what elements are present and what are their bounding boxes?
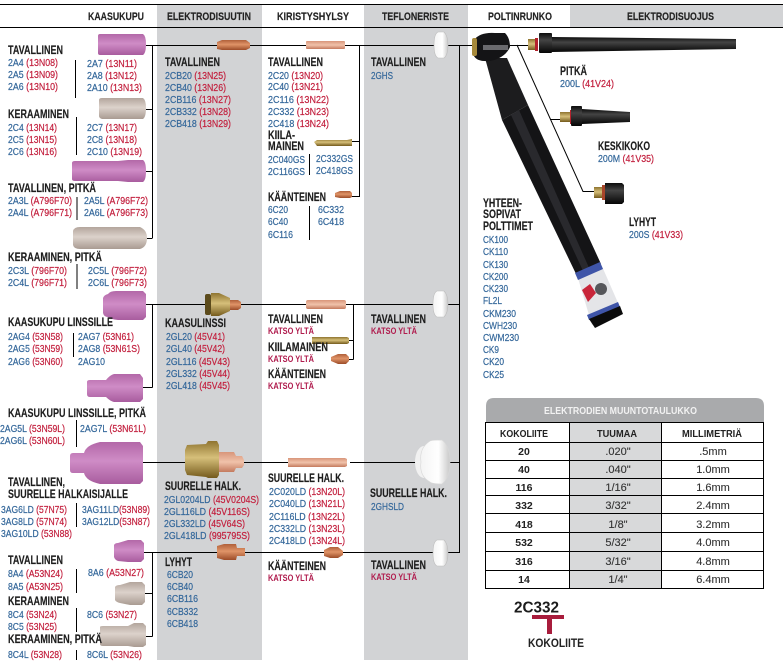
label: kaasukupu linssille: 2AG7 (53N61): [78, 331, 134, 343]
list: yhteensopivat polttimet: SOPIVAT: [483, 209, 521, 221]
label: keraaminen pitka: 2C3L (796F70): [8, 265, 67, 277]
table column headers: [500, 427, 742, 440]
label: kaanteinen katso ylta: KÄÄNTEINEN: [268, 560, 326, 573]
label: suurelle halk 2GHSLD: SUURELLE HALK.: [370, 488, 447, 500]
label: kaasukupu linssille: KAASUKUPU LINSSILLE: [8, 317, 113, 329]
label: lyhyt: 6CB418: [167, 618, 198, 630]
icon: nozzle tip: [217, 40, 250, 50]
icon: ceramic cup: [99, 98, 146, 119]
label: suurelle halk: 2GL0204LD (45V0204S): [164, 494, 259, 506]
label: tavallinen: TAVALLINEN: [8, 45, 63, 57]
table column headers: MILLIMETRIÄ: [682, 427, 742, 440]
label: kaanteinen: 6C20: [268, 204, 288, 216]
label: tavallinen pitka: 2A5L (A796F72): [84, 195, 148, 207]
label: kiilamainen: 2C116GS: [268, 166, 305, 178]
label: kaasulinssi: 2GL20 (45V41): [166, 331, 225, 343]
icon: short nozzle: [217, 544, 245, 560]
list: yhteensopivat polttimet: CK230: [483, 283, 508, 295]
label: tavallinen suurelle halkaisijalle: [1, 477, 150, 540]
label: lyhyt: LYHYT: [165, 557, 192, 569]
label: tavallinen: [268, 57, 329, 130]
label: kaasulinssi: 2GL418 (45V45): [166, 380, 230, 392]
icon: long pink cup: [72, 160, 146, 182]
panel: column background elektrodisuutin: [157, 5, 262, 660]
label: tavallinen suurelle halkaisijalle: TAVALLINEN,: [8, 477, 65, 489]
header row: [88, 11, 714, 23]
label: keraaminen 8C: 8C6 (53N27): [87, 609, 137, 621]
icon: collet: [306, 41, 345, 49]
label: keraaminen 8C: 8C5 (53N25): [8, 621, 57, 633]
label: keraaminen: 2C8 (13N18): [87, 134, 137, 146]
table rows: 1/4": [608, 574, 628, 586]
table rows: 532: [515, 537, 533, 549]
label: tavallinen suurelle halkaisijalle: 3AG12LD(53N87): [82, 516, 150, 528]
label: kaanteinen: 6C116: [268, 229, 293, 241]
table rows: 20: [518, 446, 530, 458]
heading: elektrodisuojus: ELEKTRODISUOJUS: [627, 11, 714, 23]
label: kiilamainen: [268, 130, 353, 178]
icon: long back cap: [528, 33, 736, 53]
list: yhteensopivat polttimet: CK110: [483, 246, 508, 258]
label: suurelle halk: 2C040LD (13N21L): [269, 498, 345, 510]
label: tavallinen: 2CB20 (13N25): [165, 70, 226, 82]
table title: ELEKTRODIEN MUUNTOTAULUKKO: [544, 405, 697, 417]
heading: kaasukupu: KAASUKUPU: [88, 11, 144, 23]
label: tavallinen: 2C116 (13N22): [268, 94, 329, 106]
icon: large teflon insulator: [415, 440, 450, 484]
diagonal connector to shields: [517, 45, 594, 192]
table rows: .040": [605, 464, 631, 476]
label: kaasulinssi: 2GL116 (45V43): [166, 356, 230, 368]
label: tavallinen pitka: 2A4L (A796F71): [8, 207, 72, 219]
label: kaanteinen: [268, 191, 344, 241]
list: yhteensopivat polttimet: FL2L: [483, 295, 502, 307]
label: keskikoko: KESKIKOKO: [598, 141, 650, 153]
label: tavallinen pitka: TAVALLINEN, PITKÄ: [8, 182, 96, 195]
icon: reverse collet second row: [331, 354, 349, 364]
label: lyhyt: 6CB20: [167, 569, 193, 581]
label: tavallinen katso ylta lower: TAVALLINEN: [371, 560, 426, 572]
label: tavallinen: 2A5 (13N09): [8, 69, 58, 81]
label: tavallinen suurelle halkaisijalle: 3AG6LD (57N75): [1, 504, 67, 516]
label: tavallinen suurelle halkaisijalle: 3AG8LD (57N74): [1, 516, 67, 528]
connector lines: [143, 45, 530, 636]
label: keraaminen pitka 8C: 8C6L (53N26): [87, 649, 142, 661]
label: kaasulinssi: 2GL332 (45V44): [166, 368, 230, 380]
label: second row references: KATSO YLTÄ: [268, 326, 314, 337]
table rows: 1.6mm: [696, 482, 730, 494]
label: suurelle halk: 2C332LD (13N23L): [269, 523, 345, 535]
label: tavallinen: 2CB116 (13N27): [165, 94, 231, 106]
label: keraaminen: 2C5 (13N15): [8, 134, 57, 146]
label: suurelle halk: [164, 481, 259, 542]
label: suurelle halk: 2C020LD (13N20L): [269, 486, 345, 498]
icon: long lens cup: [87, 374, 143, 402]
label: suurelle halk: [268, 473, 345, 547]
column: elektrodisuutin: [164, 40, 259, 630]
label: keraaminen pitka 8C: 8C4L (53N28): [8, 649, 62, 661]
table rows: 5/32": [605, 537, 631, 549]
icon: long collet: [288, 458, 347, 467]
heading: tefloneriste: TEFLONERISTE: [382, 11, 449, 23]
list: yhteensopivat polttimet: CWH230: [483, 320, 517, 332]
label: suurelle halk 2GHSLD: [370, 488, 447, 513]
label: pitka: [560, 65, 614, 90]
table rows: 4.8mm: [696, 556, 730, 568]
label: suurelle halk 2GHSLD: 2GHSLD: [371, 501, 404, 513]
table header bar: [486, 398, 764, 422]
label: tavallinen: 2A4 (13N08): [8, 57, 58, 69]
label: kaanteinen: 6C40: [268, 216, 288, 228]
key: 2C332 size code: [514, 600, 584, 650]
table rows: 3/16": [605, 556, 631, 568]
label: kiilamainen: 2C332GS: [316, 153, 353, 165]
icon: short pink cup: [114, 540, 144, 562]
label: tavallinen 2GHS: 2GHS: [371, 70, 393, 82]
label: tavallinen katso ylta: [371, 314, 426, 337]
icon: short ceramic cup: [115, 582, 145, 605]
list: yhteensopivat polttimet: CK130: [483, 259, 508, 271]
label: tavallinen: 2CB40 (13N26): [165, 82, 226, 94]
label: suurelle halk: 2GL332LD (45V64S): [164, 518, 245, 530]
label: tavallinen: 2CB332 (13N28): [165, 106, 231, 118]
label: tavallinen 8A: 8A6 (A53N27): [88, 567, 144, 579]
table rows: [515, 446, 730, 586]
label: tavallinen: [165, 57, 231, 130]
label: tavallinen: 2A6 (13N10): [8, 81, 58, 93]
list: yhteensopivat polttimet: POLTTIMET: [483, 221, 533, 233]
icon: teflon insulator second row: [433, 291, 448, 317]
table rows: 14: [518, 574, 530, 586]
label: kiilamainen: 2C040GS: [268, 154, 305, 166]
label: kaanteinen: KÄÄNTEINEN: [268, 191, 326, 204]
label: suurelle halk: 2C116LD (13N22L): [269, 511, 345, 523]
label: second row references: TAVALLINEN: [268, 314, 323, 326]
label: keraaminen: 2C6 (13N16): [8, 146, 57, 158]
label: tavallinen: 2C20 (13N20): [268, 70, 323, 82]
label: keskikoko: [598, 141, 654, 165]
label: tavallinen 8A: TAVALLINEN: [8, 555, 63, 567]
label: keraaminen: 2C7 (13N17): [87, 122, 137, 134]
label: lyhyt: LYHYT: [629, 217, 656, 229]
table rows: 116: [516, 482, 533, 494]
table rows: 40: [518, 464, 530, 476]
label: tavallinen: TAVALLINEN: [268, 57, 323, 69]
label: tavallinen: 2A8 (13N12): [87, 70, 137, 82]
icon: long short ceramic cup: [100, 623, 146, 647]
table rows: 2.4mm: [696, 500, 730, 512]
label: lyhyt: 6CB332: [167, 606, 198, 618]
icon: large gas lens: [185, 441, 244, 478]
table: elektrodien muuntotaulukko: [486, 398, 764, 589]
table rows: 4.0mm: [696, 537, 730, 549]
label: tavallinen katso ylta: KATSO YLTÄ: [371, 326, 417, 337]
label: kiilamainen: KIILA-: [268, 130, 295, 142]
table rows: 3/32": [605, 500, 631, 512]
label: kaasukupu linssille pitka: [0, 407, 146, 447]
list: yhteensopivat polttimet: CK200: [483, 271, 508, 283]
label: tavallinen 2GHS: [371, 57, 426, 82]
key: 2C332 size code: 2C332: [514, 600, 559, 616]
label: tavallinen: 2C40 (13N21): [268, 81, 323, 93]
label: tavallinen pitka: 2A6L (A796F73): [84, 207, 148, 219]
icon: wedge collet: [314, 139, 352, 146]
column: elektrodisuojus: [528, 33, 736, 241]
label: second row references: KIILAMAINEN: [268, 342, 328, 354]
label: tavallinen: [8, 45, 142, 94]
label: lyhyt: 200S (41V33): [629, 229, 683, 241]
label: tavallinen: 2CB418 (13N29): [165, 118, 231, 130]
label: kaasukupu linssille pitka: 2AG6L (53N60L): [0, 435, 65, 447]
heading: kiristyshylsy: KIRISTYSHYLSY: [277, 11, 350, 23]
heading: elektrodisuutin: ELEKTRODISUUTIN: [167, 11, 251, 23]
label: tavallinen katso ylta lower: KATSO YLTÄ: [371, 572, 417, 583]
label: second row references: [268, 314, 328, 392]
label: keraaminen: KERAAMINEN: [8, 109, 69, 121]
icon: reverse collet: [335, 191, 352, 198]
table rows: 332: [515, 500, 533, 512]
label: kaasukupu linssille pitka: 2AG5L (53N59L): [0, 423, 65, 435]
label: kaasulinssi: 2GL40 (45V42): [166, 343, 225, 355]
key: 2C332 size code: KOKOLIITE: [528, 638, 584, 650]
label: keraaminen pitka 8C: [8, 633, 142, 661]
label: tavallinen: TAVALLINEN: [165, 57, 220, 69]
table rows: 3.2mm: [696, 519, 730, 531]
icon: wedge collet second row: [312, 337, 349, 344]
label: kaasukupu linssille: 2AG10: [78, 356, 105, 368]
label: suurelle halk: 2C418LD (13N24L): [269, 535, 345, 547]
label: kaasukupu linssille: [8, 317, 140, 368]
label: suurelle halk: SUURELLE HALK.: [268, 473, 344, 485]
table rows: .5mm: [699, 446, 727, 458]
list: yhteensopivat polttimet: CK25: [483, 369, 504, 381]
column: kaasukupu: [0, 34, 150, 661]
label: keraaminen pitka: 2C4L (796F71): [8, 277, 67, 289]
label: kiilamainen: 2C418GS: [316, 165, 353, 177]
label: keraaminen: 2C10 (13N19): [87, 146, 142, 158]
label: keraaminen: [8, 109, 142, 158]
panel: column background tefloneriste: [364, 5, 468, 660]
list: yhteensopivat polttimet: CWM230: [483, 332, 519, 344]
label: suurelle halk: 2GL116LD (45V116S): [164, 506, 250, 518]
label: tavallinen: 2C418 (13N24): [268, 118, 329, 130]
label: kaasukupu linssille pitka: KAASUKUPU LINSSILLE, PITKÄ: [8, 407, 146, 420]
table rows: .020": [605, 446, 631, 458]
icon: long ceramic cup: [73, 227, 147, 249]
column: kiristyshylsy: [268, 41, 353, 584]
label: tavallinen 8A: 8A4 (A53N24): [8, 568, 63, 580]
list: yhteensopivat polttimet: CKM230: [483, 308, 516, 320]
panel: header background elektrodisuojus: [570, 5, 783, 27]
label: second row references: KÄÄNTEINEN: [268, 368, 326, 381]
table rows: 1/16": [605, 482, 631, 494]
label: tavallinen: 2C332 (13N23): [268, 106, 329, 118]
table rows: 1.0mm: [696, 464, 730, 476]
label: tavallinen pitka: [8, 182, 148, 219]
heading: poltinrunko: POLTINRUNKO: [488, 11, 552, 23]
icon: large cup: [70, 442, 143, 484]
icon: short collet: [324, 547, 343, 558]
label: tavallinen katso ylta lower: [371, 560, 426, 583]
label: tavallinen: 2A7 (13N11): [87, 58, 137, 70]
label: tavallinen 2GHS: TAVALLINEN: [371, 57, 426, 69]
label: keraaminen pitka: [8, 251, 147, 289]
label: kiilamainen: MAINEN: [268, 141, 304, 153]
table rows: 316: [515, 556, 533, 568]
list: yhteensopivat polttimet: YHTEEN-: [483, 198, 522, 210]
label: pitka: PITKÄ: [560, 65, 587, 78]
label: kaanteinen katso ylta: [268, 560, 326, 584]
label: keraaminen 8C: 8C4 (53N24): [8, 609, 57, 621]
label: kaasulinssi: [165, 318, 230, 392]
list: yhteensopivat polttimet: [483, 198, 533, 381]
label: kaasukupu linssille: 2AG4 (53N58): [8, 331, 63, 343]
icon: teflon insulator fourth row: [433, 540, 448, 566]
label: suurelle halk: 2GL418LD (995795S): [164, 530, 250, 542]
icon: short back cap: [594, 183, 624, 204]
label: keraaminen pitka: KERAAMINEN, PITKÄ: [8, 251, 102, 264]
label: keskikoko: 200M (41V35): [598, 153, 654, 165]
illustration: torch body: [472, 33, 623, 328]
label: keraaminen pitka 8C: KERAAMINEN, PITKÄ: [8, 633, 102, 646]
label: tavallinen 8A: 8A5 (A53N25): [8, 581, 63, 593]
label: kaanteinen katso ylta: KATSO YLTÄ: [268, 573, 314, 584]
label: tavallinen: 2A10 (13N13): [87, 82, 142, 94]
icon: pink gas cup: [98, 34, 146, 55]
icon: collet second row: [306, 300, 346, 309]
table rows: 418: [515, 519, 533, 531]
icon: lens cup: [103, 291, 146, 320]
label: kaasukupu linssille: 2AG8 (53N61S): [78, 343, 140, 355]
table column headers: KOKOLIITE: [500, 428, 548, 440]
label: lyhyt: [165, 557, 198, 630]
list: yhteensopivat polttimet: CK100: [483, 234, 508, 246]
list: yhteensopivat polttimet: CK9: [483, 344, 499, 356]
label: kaasukupu linssille pitka: 2AG7L (53N61L): [80, 423, 146, 435]
label: keraaminen 8C: [8, 596, 137, 633]
label: lyhyt: [629, 217, 683, 241]
label: tavallinen 8A: [8, 555, 144, 593]
label: tavallinen suurelle halkaisijalle: 3AG11LD(53N89): [82, 504, 150, 516]
label: keraaminen 8C: KERAAMINEN: [8, 596, 69, 608]
table rows: 1/8": [608, 519, 628, 531]
list: yhteensopivat polttimet: CK20: [483, 356, 504, 368]
label: lyhyt: 6CB116: [167, 593, 198, 605]
icon: teflon insulator: [434, 32, 448, 58]
label: second row references: KATSO YLTÄ: [268, 381, 314, 392]
label: tavallinen pitka: 2A3L (A796F70): [8, 195, 72, 207]
label: suurelle halk: SUURELLE HALK.: [165, 481, 241, 493]
label: keraaminen pitka: 2C6L (796F73): [88, 277, 147, 289]
label: second row references: KATSO YLTÄ: [268, 354, 314, 365]
icon: medium back cap: [560, 106, 630, 126]
table rows: 6.4mm: [696, 574, 730, 586]
label: kaasukupu linssille: 2AG5 (53N59): [8, 343, 63, 355]
label: lyhyt: 6CB40: [167, 581, 193, 593]
label: tavallinen suurelle halkaisijalle: SUURELLE HALKAISIJALLE: [8, 489, 128, 501]
icon: gas lens: [205, 293, 241, 316]
label: kaasukupu linssille: 2AG6 (53N60): [8, 356, 63, 368]
label: kaasulinssi: KAASULINSSI: [165, 318, 226, 330]
label: keraaminen: 2C4 (13N14): [8, 122, 57, 134]
label: tavallinen suurelle halkaisijalle: 3AG10LD (53N88): [1, 528, 72, 540]
label: tavallinen katso ylta: TAVALLINEN: [371, 314, 426, 326]
label: kaanteinen: 6C418: [318, 216, 344, 228]
column: tefloneriste: [370, 32, 450, 583]
table column headers: TUUMAA: [597, 428, 637, 440]
label: pitka: 200L (41V24): [560, 78, 614, 90]
label: keraaminen pitka: 2C5L (796F72): [88, 265, 147, 277]
label: kaanteinen: 6C332: [318, 204, 344, 216]
